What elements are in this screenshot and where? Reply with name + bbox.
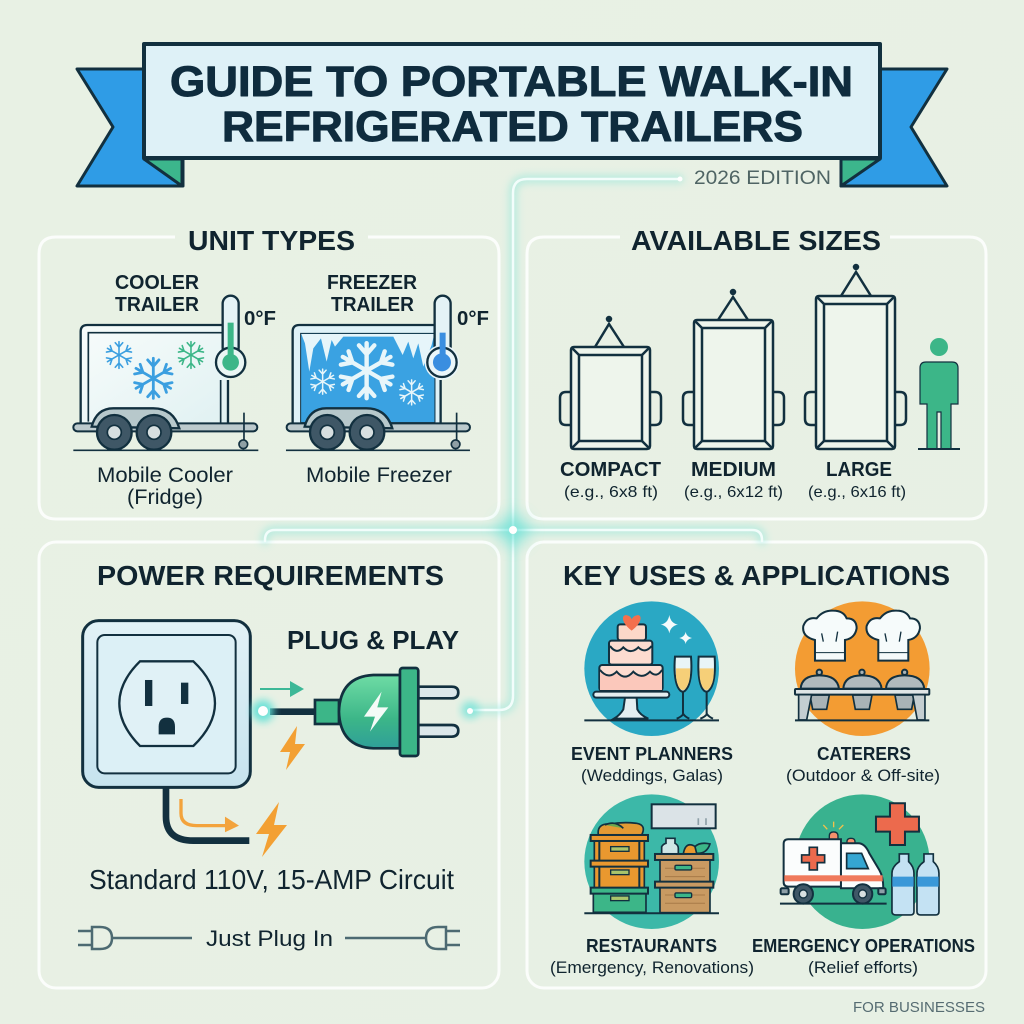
cooler trailer label: TRAILER [115,294,200,316]
icon: freezer trailer [286,296,470,450]
event planners label: (Weddings, Galas) [581,766,723,785]
panel: available sizes [527,225,986,519]
icon: wedding cake and champagne [584,601,719,736]
icon: chef hats and chafing dishes [795,601,930,736]
mobile cooler label: (Fridge) [127,486,203,509]
icon: wall outlet [83,621,250,841]
icon: small plug right [345,927,460,949]
title text: REFRIGERATED TRAILERS [222,103,803,151]
heading: power requirements: POWER REQUIREMENTS [97,560,444,591]
just plug in label: Just Plug In [206,926,333,951]
medium label: (e.g., 6x12 ft) [684,484,783,501]
icon: large trailer [805,265,906,449]
circuit label: Standard 110V, 15-AMP Circuit [89,864,454,895]
icon: person for scale [918,338,960,449]
footer label: FOR BUSINESSES [853,999,985,1016]
medium label: MEDIUM [691,459,776,481]
heading: key uses: KEY USES & APPLICATIONS [563,560,950,591]
emergency operations label: EMERGENCY OPERATIONS [752,936,975,956]
0°F label cooler: 0°F [244,308,276,330]
icon: lightning bolt small [280,726,305,770]
panel: key uses and applications [527,542,986,988]
icon: cooler trailer [73,296,258,450]
icon: medium trailer [683,290,784,449]
caterers label: (Outdoor & Off-site) [786,766,940,785]
icon: small plug left [78,927,192,949]
large label: (e.g., 6x16 ft) [808,484,906,501]
edition label: 2026 EDITION [694,168,831,189]
mobile freezer label: Mobile Freezer [306,464,452,487]
title banner [77,44,947,186]
heading: unit types: UNIT TYPES [188,225,355,256]
icon: compact trailer [560,317,661,449]
restaurants label: (Emergency, Renovations) [550,958,754,977]
emergency operations label: (Relief efforts) [808,958,918,977]
large label: LARGE [826,459,892,481]
icon: restaurant storage [584,794,719,929]
mobile cooler label: Mobile Cooler [97,464,233,487]
icon: green plug [270,668,458,756]
icon: lightning bolt large [256,802,287,857]
heading: available sizes: AVAILABLE SIZES [631,225,881,256]
glowing connector network [252,176,762,722]
compact label: COMPACT [560,459,661,481]
caterers label: CATERERS [817,744,911,764]
compact label: (e.g., 6x8 ft) [564,484,658,501]
0°F label freezer: 0°F [457,308,489,330]
panel: power requirements [39,542,499,988]
restaurants label: RESTAURANTS [586,936,717,956]
freezer trailer label: TRAILER [331,294,415,316]
cooler trailer label: COOLER [115,272,200,294]
title text: GUIDE TO PORTABLE WALK-IN [170,58,853,106]
freezer trailer label: FREEZER [327,272,418,294]
arrow: green power arrow [260,681,304,697]
event planners label: EVENT PLANNERS [571,744,733,764]
icon: ambulance, cross and water [780,794,939,929]
plug and play label: PLUG & PLAY [287,625,459,655]
panel: unit types [39,225,499,519]
